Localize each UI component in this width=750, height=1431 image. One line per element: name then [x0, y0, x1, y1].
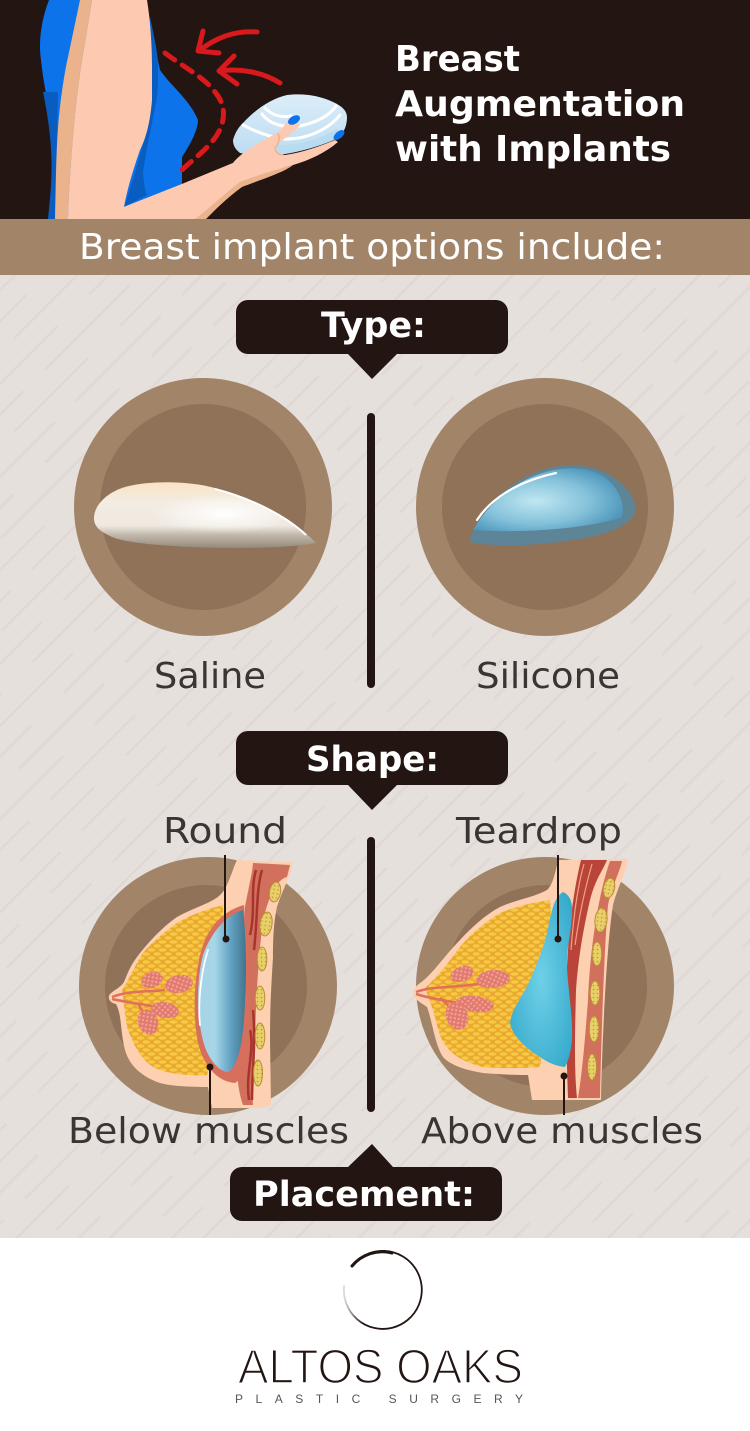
logo tagline: PLASTIC SURGERY [235, 1392, 523, 1406]
footer logo [0, 1238, 750, 1431]
vertical divider [367, 837, 375, 1112]
ribs [588, 877, 616, 1080]
shape labels: Teardrop [455, 811, 622, 852]
background pattern panel [0, 275, 750, 1238]
implant held in hand [233, 94, 347, 155]
silicone implant [469, 465, 635, 545]
subtitle band: Breast implant options include: [79, 227, 665, 268]
title: with Implants [395, 129, 671, 170]
vertical divider [367, 413, 375, 688]
shape labels [163, 811, 622, 852]
logo ring [344, 1251, 422, 1329]
heading: Placement: Placement: [253, 1175, 475, 1215]
pointer lines [207, 855, 567, 1115]
placement labels: Above muscles [421, 1111, 703, 1152]
heading: Type: Type: [321, 306, 426, 346]
title: Breast [395, 39, 520, 80]
illustration: arm holding implant [40, 0, 347, 219]
shape labels: Round [163, 811, 287, 852]
heading: Shape [236, 731, 508, 810]
logo wordmark: ALTOS OAKS [238, 1341, 523, 1394]
hand [124, 120, 338, 219]
silicone label: Silicone [476, 656, 620, 697]
red arrows and dashed incision line [165, 31, 280, 170]
placement labels: Below muscles [68, 1111, 349, 1152]
silicone option [416, 378, 674, 697]
saline implant [94, 482, 316, 548]
subtitle band [0, 219, 750, 275]
saline option [74, 378, 332, 697]
saline label: Saline [154, 656, 266, 697]
lobules and ducts [416, 963, 511, 1033]
diagram: round implant below muscles [79, 857, 337, 1115]
heading: Type [236, 300, 508, 379]
lobules and ducts [112, 969, 194, 1038]
title: Augmentation [395, 84, 685, 125]
diagram: teardrop implant above muscles [413, 857, 674, 1115]
header band [0, 0, 750, 219]
placement labels [68, 1111, 703, 1152]
title [395, 39, 685, 170]
heading: Placement [230, 1144, 502, 1221]
heading: Shape: Shape: [306, 740, 439, 780]
ribs [254, 881, 282, 1086]
